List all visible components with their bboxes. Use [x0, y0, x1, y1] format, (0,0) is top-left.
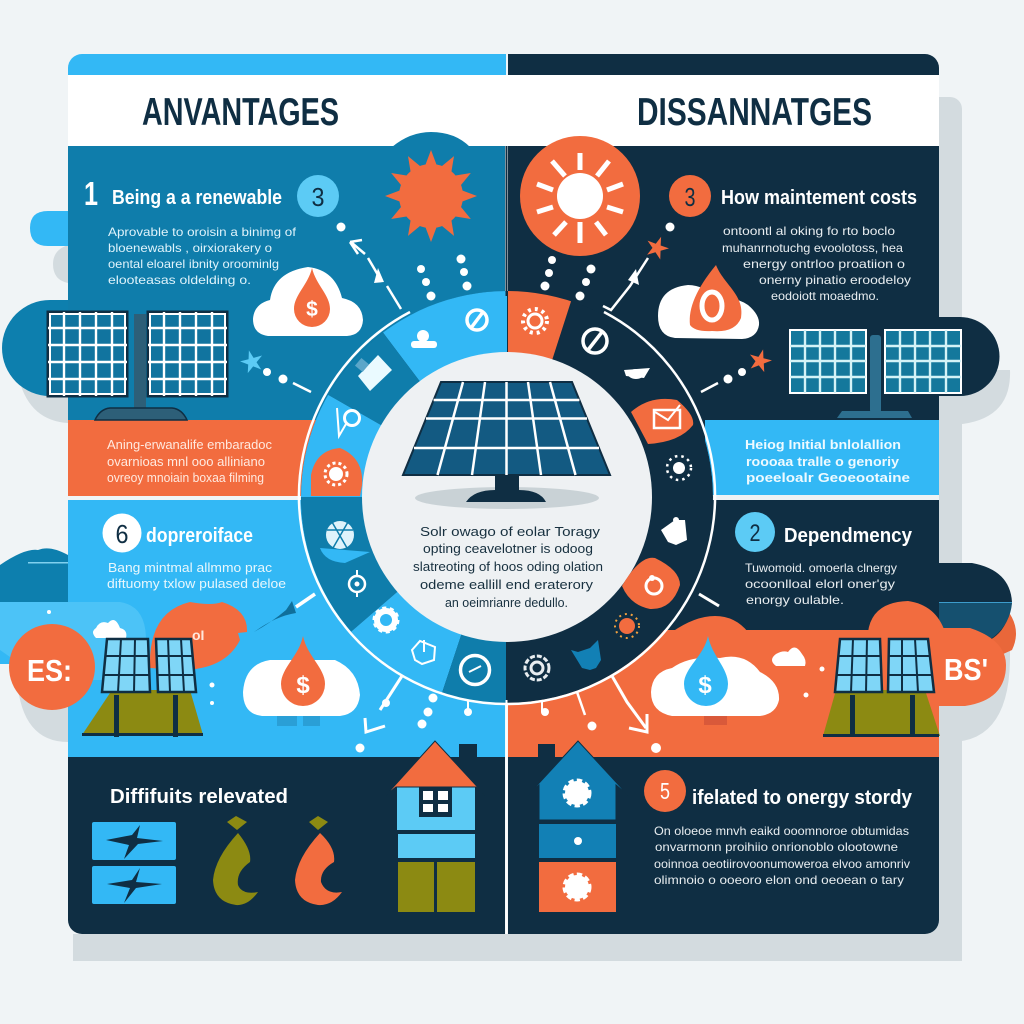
icon: orange blob with glyph	[622, 558, 680, 609]
right mid dots star	[701, 346, 774, 392]
icon: orange envelope blob	[631, 399, 693, 444]
panel: disadvantages blue band	[705, 420, 939, 495]
ring segment: top-left light blue	[383, 291, 507, 382]
central description text: an oeimrianre dedullo.	[445, 596, 568, 610]
item 1 body text: elooteasas oldelding o.	[108, 273, 251, 287]
badge 3 right	[669, 175, 711, 217]
panel: disadvantages top dark	[508, 146, 939, 630]
panel: advantages light blue	[68, 500, 505, 757]
sparkles left	[47, 610, 214, 705]
right bottom body: olimnoio o ooeoro elon ond oeoean o tary	[654, 873, 904, 887]
lower-left fin	[254, 601, 296, 632]
ring segment: lower-left blue	[301, 497, 398, 632]
panel: disadvantages orange	[508, 630, 939, 757]
orange band text: ovreoy mnoiain boxaa filming	[107, 471, 264, 485]
icon: cloud with dollar drop lower right	[651, 636, 779, 725]
dots and arrows from left sun	[336, 222, 472, 309]
right item 3 body text: eodoiott moaedmo.	[771, 289, 879, 303]
right bottom body	[654, 824, 910, 887]
ring icons	[311, 309, 693, 684]
blue band text right: poeeloalr Geoeootaine	[746, 470, 910, 485]
right mid body	[745, 561, 897, 607]
icon: right sun	[520, 136, 640, 256]
icon: no symbol right	[583, 329, 607, 353]
icon: piggy	[661, 517, 687, 545]
icon: orange ES badge	[9, 624, 95, 710]
left mid body: diftuomy txlow pulased deloe	[107, 577, 286, 591]
icon: cloud with dollar drop left top: $	[306, 298, 318, 321]
icon: right house	[528, 741, 628, 912]
icon: no symbol light blue segment	[467, 310, 487, 330]
left mid: badge 6	[102, 514, 142, 552]
heading: advantages: ANVANTAGES	[142, 91, 339, 134]
icon: orange gear top right	[523, 309, 547, 333]
icon: lightning tiles	[92, 822, 176, 904]
central light disc	[362, 352, 652, 642]
top colour bars	[68, 54, 939, 75]
right bottom body: ooinnoa oeotiirovoonumoweroa elvoo amonriv	[654, 857, 910, 871]
right mid body: ocoonlloal elorl oner'gy	[745, 577, 895, 591]
lower-left orange blob	[150, 602, 247, 670]
lower-right small cloud	[772, 647, 806, 666]
right bottom body: onvarmonn proihiio onrionoblo olootowne	[655, 840, 898, 854]
right item 3 body text: muhanrnotuchg evoolotoss, hea	[722, 241, 903, 255]
icon: orange gear blob	[311, 448, 362, 496]
lower-right orange dome	[672, 616, 748, 632]
item 1 body text: oental eloarel ibnity oroominlg	[108, 257, 279, 271]
icon: cloud with drop right top	[658, 265, 759, 339]
lower-right right blob	[868, 601, 945, 632]
icon: orange ES badge: ES:	[27, 653, 72, 688]
left mid body	[107, 561, 286, 591]
left mid: badge 6: 6	[116, 519, 128, 549]
right mid body: Tuwomoid. omoerla clnergy	[745, 561, 897, 575]
lower-left small cloud	[93, 620, 126, 638]
icon: cloud with dollar drop lower left	[243, 636, 360, 726]
bottom-left heading: Diffifuits relevated	[110, 786, 288, 808]
panel: advantages bottom dark	[68, 757, 505, 934]
icon: orange teardrop	[295, 816, 342, 905]
right item 3 body text	[722, 224, 911, 303]
icon: cloud with dollar drop left top	[253, 267, 363, 336]
icon: central solar panel	[403, 382, 610, 509]
lower-left small solar array: oI	[192, 627, 204, 643]
panel: disadvantages bottom dark	[508, 757, 939, 934]
central ring wheel	[301, 291, 713, 703]
icon: magnifier	[337, 408, 360, 436]
badge 3 left	[297, 175, 339, 217]
panel: advantages top	[68, 146, 505, 420]
right item 3 body text: onerny pinatio eroodeloy	[759, 273, 911, 287]
right bottom heading: ifelated to onergy stordy	[692, 787, 913, 809]
badge 5	[644, 770, 686, 812]
heading: disadvantages: DISSANNATGES	[637, 91, 872, 134]
orange band text: ovarnioas mnl ooo alliniano	[107, 455, 265, 469]
icon: olive teardrop	[213, 816, 258, 905]
right item 3 body text: ontoontl al oking fo rto boclo	[723, 224, 895, 238]
ring segment: left light blue	[301, 394, 381, 497]
blob behind left sun	[392, 132, 470, 147]
ring segment: bottom-left light blue	[351, 592, 462, 692]
right mid heading: Dependmency	[784, 525, 913, 547]
badge 3 left: 3	[312, 182, 324, 212]
icon: orange BS badge: BS'	[944, 652, 988, 687]
central description text: opting ceavelotner is odoog	[423, 542, 593, 556]
central description text: slatreoting of hoos oding olation	[413, 560, 603, 574]
icon: target	[349, 570, 365, 597]
white header band	[68, 75, 939, 146]
right bottom body: On oloeoe mnvh eaikd ooomnoroe obtumidas	[654, 824, 909, 838]
vertical divider lines	[506, 146, 508, 934]
icon: orange BS badge	[930, 628, 1006, 706]
right item 3 heading: How maintement costs	[721, 187, 917, 209]
item 1 body text	[108, 225, 297, 287]
ring segment: top-right orange	[508, 291, 572, 360]
panel: advantages orange band	[68, 420, 316, 496]
icon: paper stack	[355, 355, 392, 391]
lower-left arrows	[296, 594, 472, 752]
ring outer white arc	[299, 312, 715, 704]
icon: right solar panel pair	[790, 330, 961, 418]
icon: bug	[624, 368, 650, 379]
icon: cloud with dollar drop lower left: $	[296, 672, 310, 699]
blue band text right: roooaa tralle o genoriy	[746, 454, 900, 469]
icon: chain	[412, 640, 435, 664]
lower-right arrows	[541, 594, 719, 753]
lower-left translucent panel	[0, 602, 146, 680]
left mid body: Bang mintmal allmmo prac	[108, 561, 272, 575]
icon: left house	[386, 741, 485, 912]
item 1 number: 1	[84, 175, 98, 212]
ring base right dark	[301, 291, 713, 703]
badge 3 right: 3	[684, 182, 696, 212]
icon: key shape	[411, 330, 437, 348]
right mid: badge 2: 2	[750, 520, 760, 547]
central description text: Solr owago of eolar Toragy	[420, 525, 601, 539]
icon: gear	[374, 608, 398, 632]
central description text: odeme eallill end eraterory	[420, 578, 594, 592]
lower-right small solar array	[823, 639, 940, 737]
arrow right upper	[540, 222, 674, 310]
orange band text	[107, 438, 272, 485]
orange band text: Aning-erwanalife embaradoc	[107, 438, 272, 452]
icon: left sun	[385, 150, 477, 242]
icon: left solar panel pair	[48, 312, 227, 420]
ring segment: upper-left blue	[328, 332, 420, 425]
sparkles right	[804, 666, 824, 698]
blue band text right: Heiog Initial bnlolallion	[745, 437, 901, 452]
icon: white gear bottom	[525, 656, 549, 680]
item 1 heading: Being a a renewable	[112, 187, 282, 209]
right item 3 body text: energy ontrloo proatiion o	[743, 257, 905, 271]
main panel	[68, 54, 939, 934]
badge 5: 5	[660, 778, 670, 804]
item 1 body text: bloenewabls , oirxiorakery o	[108, 241, 272, 255]
icon: globe	[320, 521, 370, 563]
divider strip	[705, 495, 939, 500]
left mid heading: dopreroiface	[146, 525, 253, 547]
central description text	[413, 525, 603, 610]
left mid dots star	[238, 347, 311, 392]
icon: sun small	[667, 456, 691, 480]
icon: blue shield	[571, 640, 601, 670]
icon: orange spark	[615, 614, 639, 638]
item 1 body text: Aprovable to oroisin a binimg of	[108, 225, 297, 239]
ring segment: bottom blue	[442, 634, 506, 703]
right mid body: enorgy oulable.	[746, 593, 844, 607]
icon: gauge	[460, 656, 490, 684]
lower-left small solar array	[82, 627, 204, 737]
icon: cloud with dollar drop lower right: $	[698, 672, 712, 699]
right mid: badge 2	[735, 512, 775, 552]
blue band text right	[745, 437, 910, 485]
